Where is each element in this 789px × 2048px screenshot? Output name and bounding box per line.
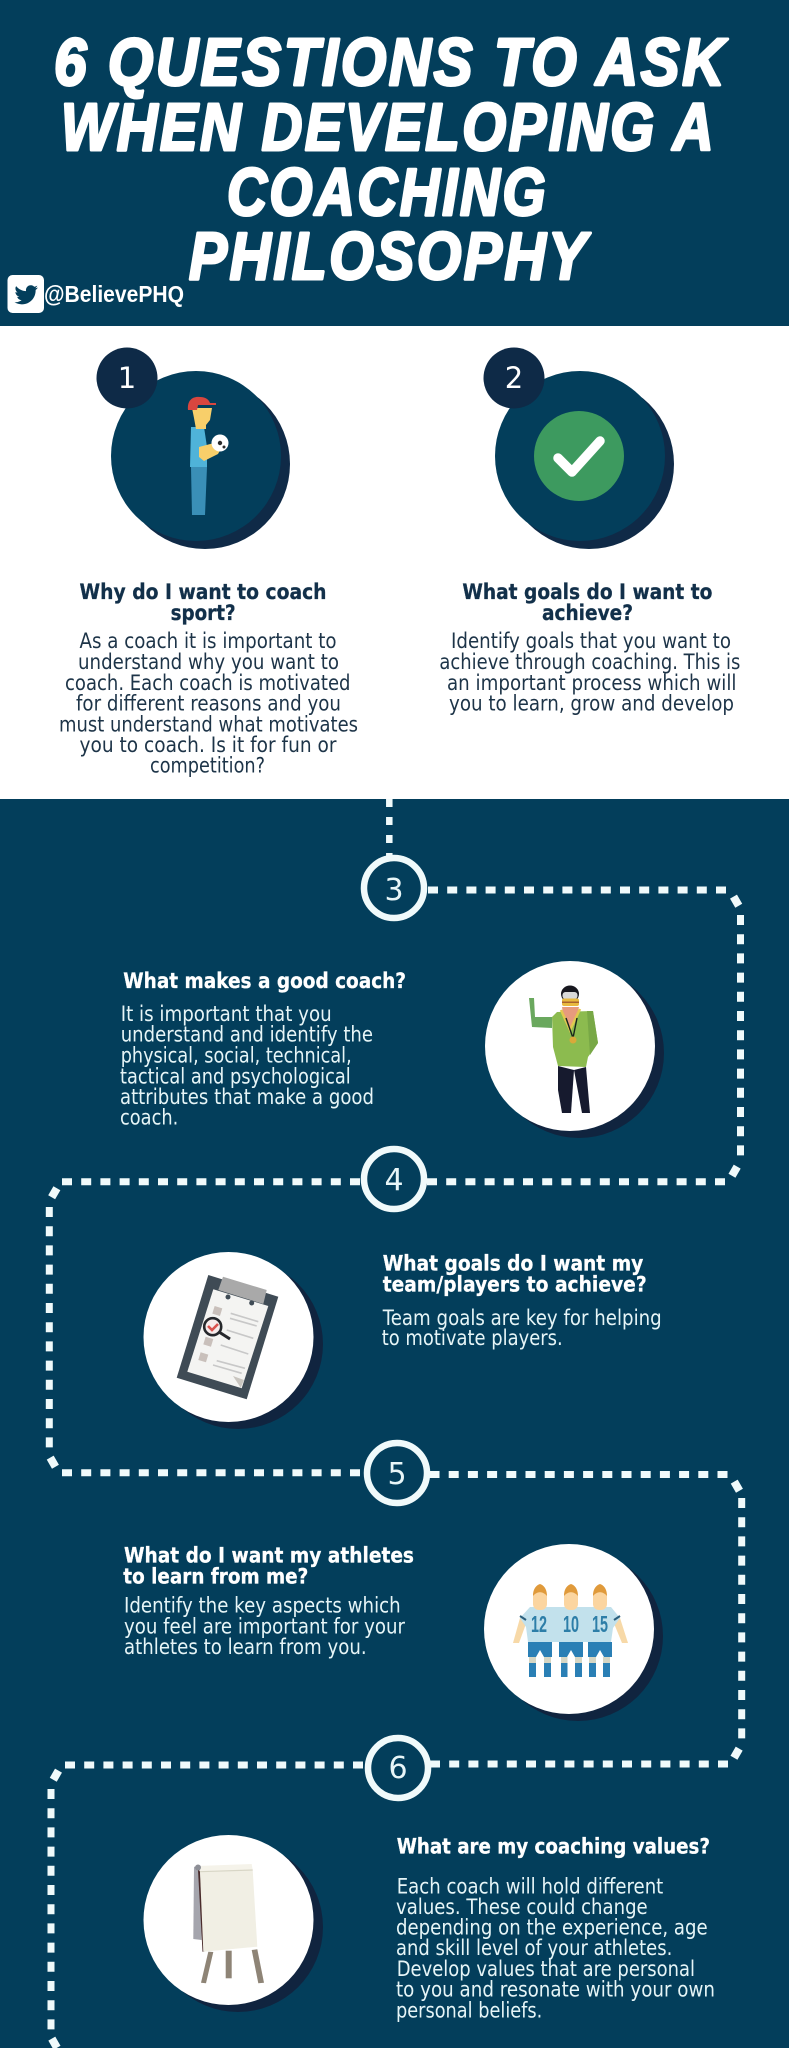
panel: header [0, 0, 789, 326]
panel: question 1 [59, 348, 358, 778]
heading 2 [462, 580, 712, 625]
icon: coach with ball [111, 371, 290, 549]
number badge 2: 2 [505, 361, 523, 395]
text block 1: for different reasons and you [76, 692, 341, 716]
section 6: coaching values [144, 1834, 715, 2022]
number ring 6: 6 [388, 1751, 408, 1786]
twitter handle [8, 275, 184, 313]
heading 1: Why do I want to coach [80, 580, 326, 604]
text block 3: It is important that you [121, 1002, 332, 1026]
icon: three players: 15 [592, 1611, 608, 1637]
number ring 3 [364, 858, 424, 918]
text block 6: to you and resonate with your own [396, 1978, 715, 2002]
heading 5: to learn from me? [123, 1564, 308, 1588]
section 3: what makes a good coach [120, 961, 664, 1138]
text block 2 [439, 629, 740, 716]
icon: flip chart easel [144, 1835, 323, 2012]
text block 6: depending on the experience, age [396, 1916, 708, 1940]
text block 2: achieve through coaching. This is [439, 650, 740, 674]
text block 3: coach. [120, 1106, 178, 1130]
text block 3: physical, social, technical, [121, 1043, 352, 1067]
text block 5: Identify the key aspects which [124, 1594, 401, 1618]
icon: coach in green hoodie [485, 961, 664, 1138]
number badge 1: 1 [118, 361, 136, 395]
number badge 1 [96, 348, 158, 408]
text block 4: to motivate players. [382, 1326, 563, 1350]
text block 5 [124, 1594, 405, 1659]
text block 4 [382, 1306, 662, 1350]
panel: dark journey background [0, 799, 789, 2048]
text block 1: understand why you want to [78, 650, 339, 674]
text block 6: values. These could change [396, 1895, 648, 1919]
heading 5: What do I want my athletes [124, 1543, 414, 1567]
number ring 6 [368, 1738, 428, 1798]
number ring 4 [364, 1149, 424, 1209]
section 5: what athletes learn [123, 1543, 663, 1721]
icon: three players: 10 [563, 1611, 579, 1637]
text block 6: Develop values that are personal [397, 1957, 695, 1981]
text block 1: coach. Each coach is motivated [65, 671, 350, 695]
text block 4: Team goals are key for helping [382, 1306, 662, 1330]
icon: three players [484, 1544, 663, 1721]
title: COACHING [227, 155, 548, 230]
icon: clipboard checklist [144, 1252, 323, 1429]
icon: green check [495, 371, 674, 549]
heading 1: sport? [171, 601, 236, 625]
heading 2: What goals do I want to [462, 580, 712, 604]
text block 1 [59, 629, 358, 778]
heading 1 [80, 580, 326, 625]
heading 2: achieve? [542, 601, 633, 625]
text block 6: Each coach will hold different [397, 1874, 663, 1898]
text block 5: athletes to learn from you. [124, 1635, 367, 1659]
title [54, 25, 728, 294]
heading 4: What goals do I want my [383, 1252, 644, 1276]
heading 4 [383, 1252, 647, 1297]
text block 3: understand and identify the [121, 1023, 373, 1047]
heading 5 [123, 1543, 414, 1588]
number badge 2 [484, 348, 544, 408]
text block 1: As a coach it is important to [80, 629, 336, 653]
text block 1: you to coach. Is it for fun or [80, 733, 337, 757]
text block 2: an important process which will [447, 671, 736, 695]
section 4: team goals [144, 1252, 662, 1429]
heading 6: What are my coaching values? [397, 1834, 710, 1858]
number ring 5: 5 [387, 1457, 407, 1492]
number ring 4: 4 [384, 1163, 404, 1198]
panel: question 2 [439, 348, 740, 716]
heading 3: What makes a good coach? [123, 969, 406, 993]
text block 6: and skill level of your athletes. [396, 1936, 672, 1960]
number ring 3: 3 [384, 873, 404, 908]
twitter handle: @BelievePHQ [44, 281, 184, 307]
text block 6 [396, 1874, 715, 2022]
text block 1: competition? [150, 754, 265, 778]
heading 4: team/players to achieve? [383, 1273, 647, 1297]
text block 3: attributes that make a good [120, 1085, 374, 1109]
title: PHILOSOPHY [189, 219, 591, 294]
icon: twitter bird [8, 275, 44, 313]
text block 3 [120, 1002, 374, 1130]
text block 5: you feel are important for your [124, 1614, 405, 1638]
icon: three players: 12 [531, 1611, 547, 1637]
text block 2: Identify goals that you want to [451, 629, 731, 653]
text block 2: you to learn, grow and develop [449, 692, 734, 716]
text block 6: personal beliefs. [396, 1998, 542, 2022]
number ring 5 [367, 1443, 427, 1503]
dashed route path [47, 799, 743, 2048]
text block 3: tactical and psychological [120, 1064, 351, 1088]
text block 1: must understand what motivates [59, 713, 358, 737]
